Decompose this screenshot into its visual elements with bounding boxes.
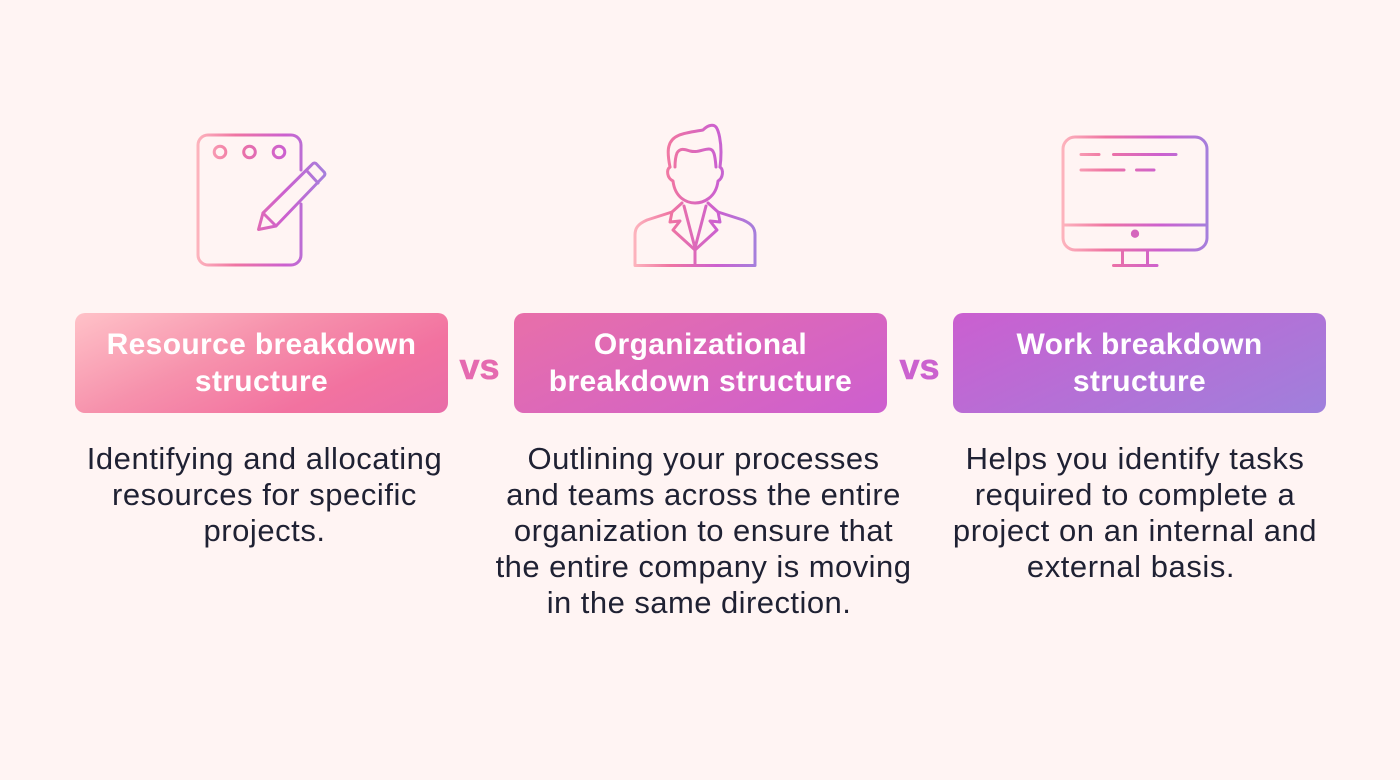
- description: resource breakdown: [87, 441, 442, 548]
- panel header: Resource breakdown structure: structure: [195, 364, 328, 398]
- description: resource breakdown: resources for specific: [112, 477, 417, 512]
- panel header: Resource breakdown structure: [75, 313, 448, 413]
- panel header: Organizational breakdown structure: breakdown structure: [549, 364, 852, 398]
- icon: person in suit: [635, 125, 755, 266]
- icon: desktop monitor: [1063, 137, 1207, 266]
- icon: notepad and pencil: [198, 135, 325, 265]
- description: organizational breakdown: [496, 441, 911, 620]
- description: work breakdown: Helps you identify tasks: [966, 441, 1304, 476]
- description: organizational breakdown: and teams across the entire: [506, 477, 901, 512]
- panel header: Resource breakdown structure: Resource breakdown: [107, 328, 416, 361]
- panel header: Organizational breakdown structure: Organizational: [594, 328, 807, 361]
- vs label: vs: [459, 346, 500, 387]
- description: resource breakdown: Identifying and allocating: [87, 441, 442, 476]
- vs label: vs: [899, 346, 940, 387]
- panel header: Work breakdown structure: [953, 313, 1326, 413]
- panel header: Work breakdown structure: structure: [1073, 364, 1206, 398]
- description: work breakdown: project on an internal and: [953, 513, 1317, 548]
- description: work breakdown: required to complete a: [975, 477, 1295, 512]
- description: organizational breakdown: Outlining your processes: [528, 441, 879, 476]
- description: work breakdown: [953, 441, 1317, 584]
- description: organizational breakdown: in the same direction.: [547, 585, 851, 620]
- description: resource breakdown: projects.: [203, 513, 326, 548]
- description: organizational breakdown: the entire company is moving: [496, 549, 911, 584]
- description: organizational breakdown: organization to ensure that: [514, 513, 893, 548]
- description: work breakdown: external basis.: [1027, 549, 1235, 584]
- panel header: Organizational breakdown structure: [514, 313, 887, 413]
- panel header: Work breakdown structure: Work breakdown: [1016, 328, 1263, 361]
